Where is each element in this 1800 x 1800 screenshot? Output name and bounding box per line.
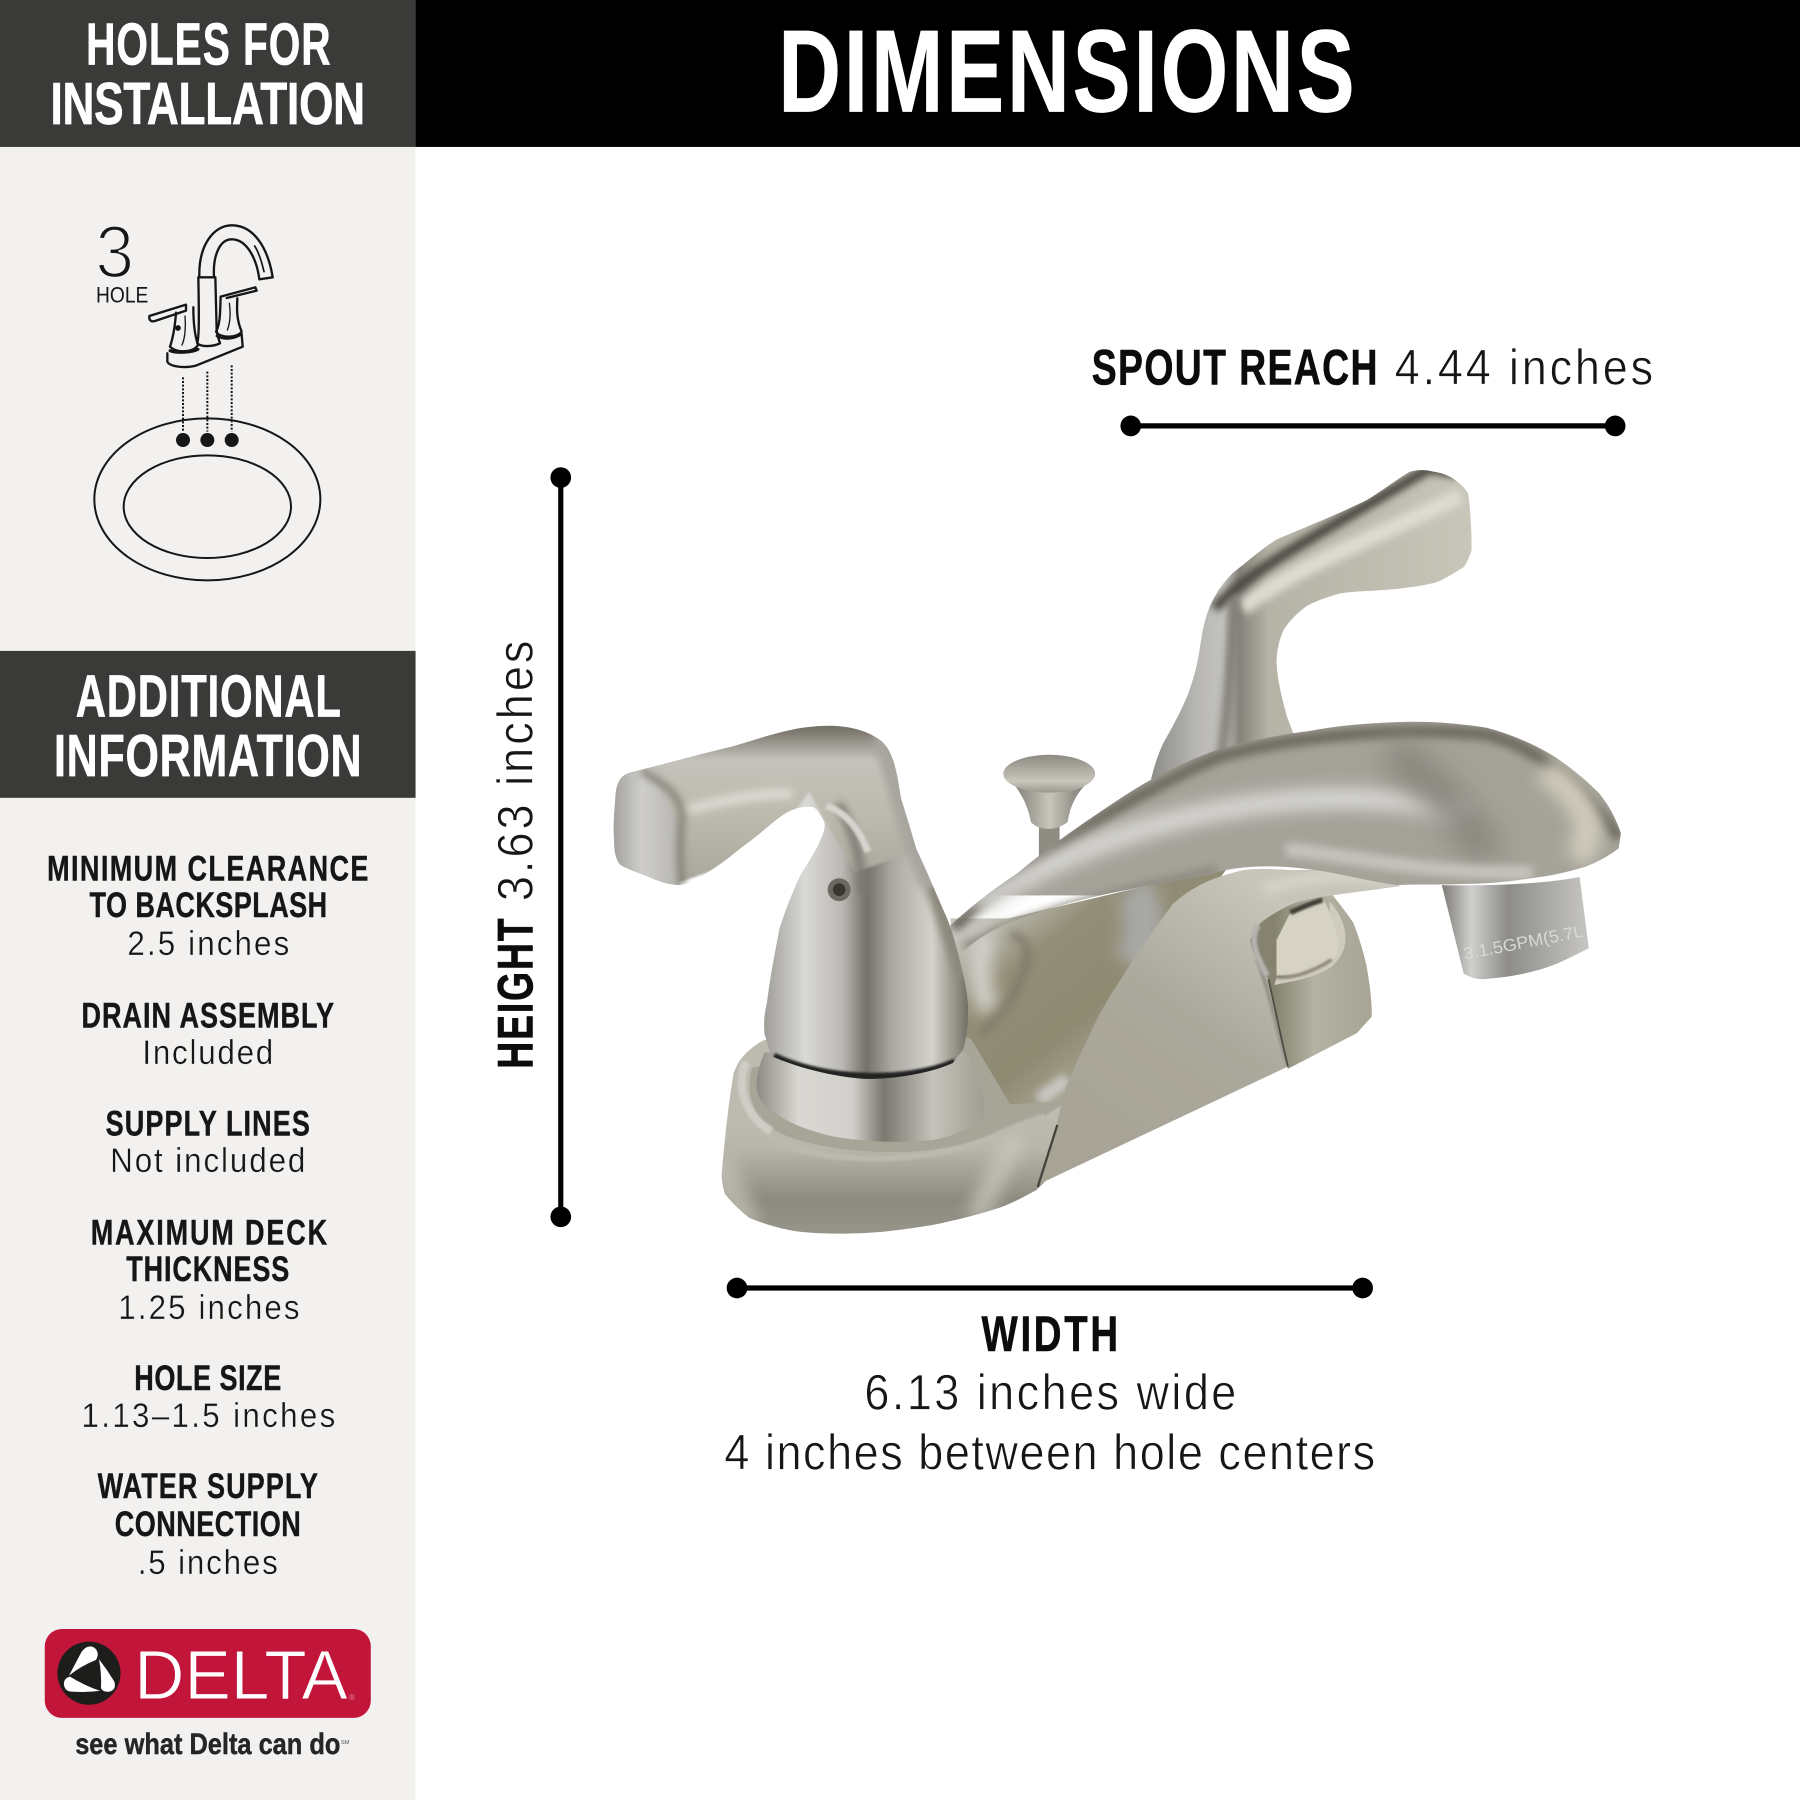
header: additional information: INFORMATION	[54, 723, 362, 790]
faucet: left base	[722, 1037, 1063, 1234]
dimension: width: 6.13 inches wide	[864, 1365, 1236, 1421]
spec: hole size	[82, 1358, 335, 1434]
panel: left sidebar	[0, 0, 416, 1800]
icon: small faucet	[149, 225, 273, 367]
dimension: width: 4 inches between hole centers	[724, 1425, 1375, 1481]
faucet: pop-up knob	[1003, 755, 1095, 863]
faucet: collar ring	[757, 1053, 985, 1142]
faucet: rear body shadow	[950, 870, 1226, 1104]
logo: delta: SM	[341, 1740, 350, 1746]
icon label: 3 hole: HOLE	[96, 283, 148, 308]
spec: maximum deck thickness: THICKNESS	[126, 1248, 289, 1289]
logo: delta: DELTA	[134, 1636, 348, 1714]
spec: maximum deck thickness: MAXIMUM DECK	[91, 1212, 327, 1252]
spec: water supply connection: CONNECTION	[115, 1503, 301, 1544]
dimension: spout reach: 4.44 inches	[1395, 340, 1653, 396]
spec: water supply connection: .5 inches	[138, 1542, 278, 1581]
icon: dotted guide lines	[183, 365, 232, 432]
spec: maximum deck thickness: 1.25 inches	[118, 1288, 300, 1326]
faucet: spout	[941, 712, 1630, 947]
header: holes for installation: HOLES FOR	[86, 10, 331, 77]
spec: water supply connection: WATER SUPPLY	[98, 1465, 318, 1506]
spec: drain assembly: Included	[142, 1033, 273, 1071]
icon label: 3 hole: 3	[95, 211, 134, 294]
logo mark blades	[64, 1646, 115, 1692]
dimension: height: HEIGHT	[488, 918, 544, 1069]
faucet: left handle	[608, 712, 976, 1085]
logo: delta	[45, 1629, 371, 1761]
spec: hole size: HOLE SIZE	[134, 1358, 281, 1398]
header: holes for installation	[0, 0, 416, 147]
header: holes for installation: INSTALLATION	[51, 71, 365, 138]
spec: minimum clearance: 2.5 inches	[127, 924, 289, 962]
spec: supply lines	[106, 1103, 310, 1179]
spec: hole size: 1.13–1.5 inches	[82, 1396, 335, 1434]
faucet: right base	[1246, 884, 1372, 1069]
logo: delta: see what Delta can do	[75, 1728, 340, 1761]
faucet illustration	[608, 459, 1630, 1240]
title: dimensions	[416, 0, 1800, 147]
title: dimensions: DIMENSIONS	[778, 6, 1355, 136]
logo: delta: ®	[349, 1693, 355, 1702]
dimension: spout reach	[1092, 340, 1653, 436]
faucet: rear lever handle	[1151, 470, 1472, 780]
header: additional information	[0, 651, 416, 798]
spec: minimum clearance: TO BACKSPLASH	[90, 885, 327, 925]
spec: supply lines: Not included	[110, 1141, 305, 1179]
spec: minimum clearance: MINIMUM CLEARANCE	[47, 848, 368, 888]
faucet: aerator: 3.1.5GPM(5.7L	[1462, 921, 1585, 964]
dimension: width	[724, 1278, 1375, 1481]
dimension: height	[488, 467, 571, 1227]
spec: supply lines: SUPPLY LINES	[106, 1103, 310, 1143]
icon label: 3 hole	[95, 211, 148, 308]
spec: drain assembly: DRAIN ASSEMBLY	[82, 995, 334, 1035]
dimension: height: 3.63 inches	[488, 641, 544, 901]
faucet: front body	[1036, 868, 1400, 1188]
spec: water supply connection	[98, 1465, 318, 1581]
header: additional information: ADDITIONAL	[76, 662, 341, 729]
icon: sink	[94, 418, 320, 580]
icon: three hole faucet over sink	[94, 211, 320, 580]
spec: drain assembly	[82, 995, 334, 1071]
dimension: width: WIDTH	[982, 1305, 1118, 1362]
faucet: handle screw	[828, 878, 851, 901]
spec: maximum deck thickness	[91, 1212, 327, 1326]
faucet: aerator	[1442, 877, 1589, 979]
spec: minimum clearance	[47, 848, 368, 962]
dimension: spout reach: SPOUT REACH	[1092, 340, 1378, 396]
